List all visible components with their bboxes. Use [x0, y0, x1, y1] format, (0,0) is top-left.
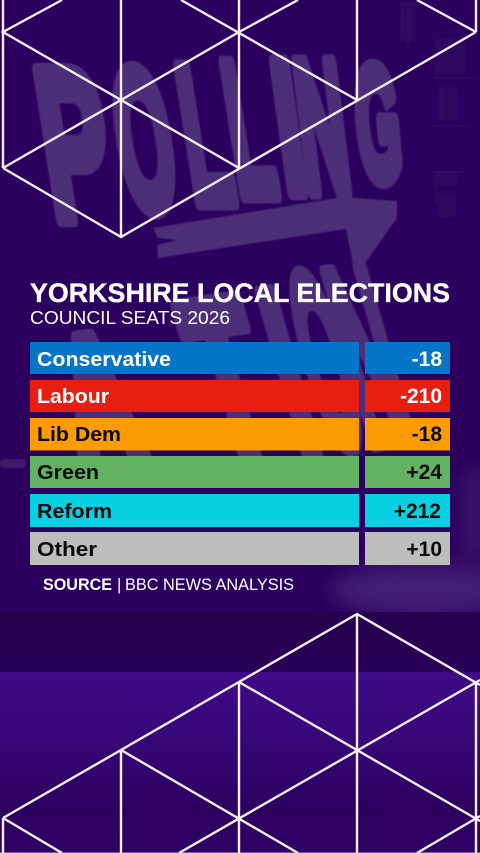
row: Conservative — [30, 342, 450, 374]
row: Green — [30, 456, 450, 488]
background photo: polling station sign: O — [98, 29, 190, 252]
subtitle: COUNCIL SEATS 2026 — [30, 307, 230, 328]
row: Green: Green — [37, 461, 99, 484]
row: Labour: -210 — [400, 385, 442, 408]
row: Labour — [30, 380, 450, 412]
row: Labour: Labour — [37, 385, 109, 408]
background photo: polling station sign: P — [22, 25, 127, 265]
background photo: polling station sign: I — [237, 238, 342, 514]
source line: BBC NEWS ANALYSIS — [125, 576, 294, 594]
row: Lib Dem: -18 — [412, 423, 442, 446]
background photo: polling station sign: N — [303, 215, 434, 499]
bottom triangle lattice — [3, 614, 480, 853]
row: Conservative: -18 — [412, 348, 442, 371]
row: Conservative: Conservative — [37, 348, 171, 371]
background photo: polling station sign: I — [261, 24, 316, 232]
row: Reform: Reform — [37, 500, 112, 523]
background photo: polling station sign: G — [348, 35, 408, 214]
row: Other: Other — [37, 538, 97, 561]
background photo: polling station sign: N — [285, 23, 359, 231]
background photo: polling station sign: O — [264, 220, 388, 503]
background photo: polling station sign: L — [165, 25, 245, 244]
background photo: haze lower right — [0, 470, 480, 852]
row: Green: +24 — [406, 461, 442, 484]
sign arrow — [153, 197, 397, 264]
background photo: brick wall texture — [402, 5, 478, 218]
row: Other: +10 — [406, 538, 442, 561]
row: Reform: +212 — [394, 500, 441, 523]
source line: SOURCE — [43, 576, 112, 594]
top triangle lattice — [3, 0, 476, 237]
results table — [30, 342, 450, 565]
background photo: polling station sign: L — [211, 23, 287, 236]
row: Other — [30, 532, 450, 565]
background photo: polling station sign — [0, 23, 434, 531]
title: YORKSHIRE LOCAL ELECTIONS — [30, 278, 450, 308]
background photo: polling station sign: T — [158, 245, 304, 531]
background photo: polling station sign: A — [38, 293, 162, 510]
row: Reform — [30, 494, 450, 527]
row: Lib Dem: Lib Dem — [37, 423, 121, 446]
source line: | — [117, 576, 121, 594]
row: Lib Dem — [30, 418, 450, 450]
